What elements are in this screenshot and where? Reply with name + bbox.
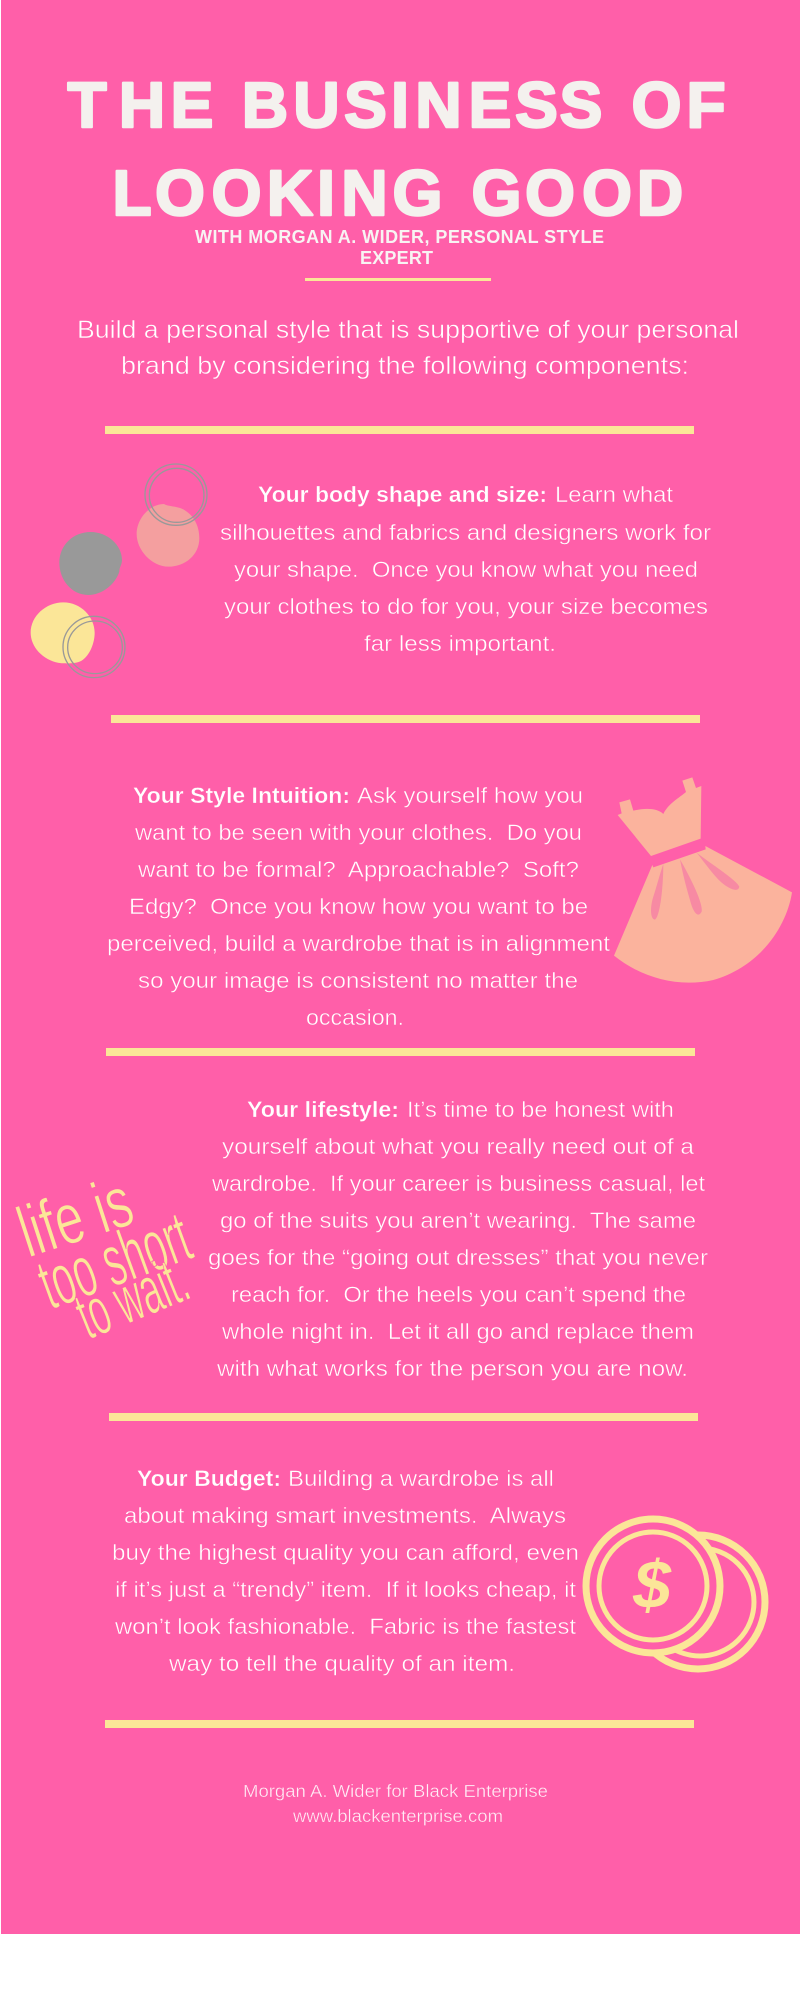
text: body shape and size: far less important.	[364, 631, 556, 656]
text: lifestyle: whole night in. Let it all go and replace them	[221, 1319, 694, 1344]
text: style intuition: so your image is consistent no matter the	[138, 968, 578, 993]
icon: coins: $	[632, 1547, 672, 1623]
divider 1	[105, 426, 694, 434]
text: budget: way to tell the quality of an item.	[168, 1651, 515, 1676]
text: body shape and size	[220, 482, 711, 656]
text: lifestyle: yourself about what you really need out of a	[222, 1134, 695, 1159]
title: THE	[67, 69, 213, 141]
text: lifestyle: go of the suits you aren’t wearing. The same	[220, 1208, 696, 1233]
text: budget: won’t look fashionable. Fabric is the fastest	[114, 1614, 576, 1639]
hand-lettered quote: too short	[28, 1197, 201, 1325]
footer credit	[243, 1781, 548, 1826]
text: lifestyle: goes for the “going out dresses” that you never	[208, 1245, 708, 1270]
text: style intuition: perceived, build a wardrobe that is in alignment	[107, 931, 610, 956]
hand-lettered quote: to wait.	[65, 1240, 199, 1354]
title	[67, 69, 726, 229]
title: GOOD	[472, 157, 683, 229]
icon: circles and rings	[31, 464, 207, 678]
text: lifestyle: It’s time to be honest with	[407, 1097, 674, 1122]
title: LOOKING	[112, 157, 442, 229]
intro text: brand by considering the following components:	[121, 352, 689, 380]
text: budget	[112, 1466, 579, 1676]
text: budget: about making smart investments. Always	[124, 1503, 566, 1528]
text: body shape and size: your clothes to do for you, your size becomes	[224, 594, 708, 619]
text: lifestyle	[208, 1097, 708, 1381]
footer credit: www.blackenterprise.com	[292, 1806, 503, 1826]
text: budget: Building a wardrobe is all	[288, 1466, 554, 1491]
text: budget: buy the highest quality you can afford, even	[112, 1540, 579, 1565]
icon: coins	[586, 1519, 765, 1669]
text: budget: if it’s just a “trendy” item. If it looks cheap, it	[115, 1577, 576, 1602]
text: style intuition: occasion.	[306, 1005, 404, 1030]
divider 4	[109, 1413, 698, 1421]
text: budget: Your Budget:	[137, 1466, 281, 1491]
text: body shape and size: Learn what	[555, 482, 673, 507]
text: body shape and size: Your body shape and size:	[258, 482, 547, 507]
text: lifestyle: with what works for the person you are now.	[216, 1356, 688, 1381]
footer credit: Morgan A. Wider for Black Enterprise	[243, 1781, 548, 1801]
text: style intuition	[107, 783, 610, 1030]
hand-lettered quote: life is	[8, 1162, 142, 1274]
text: lifestyle: Your lifestyle:	[247, 1097, 399, 1122]
text: body shape and size: silhouettes and fabrics and designers work for	[220, 520, 711, 545]
intro text: Build a personal style that is supportive of your personal	[77, 316, 739, 344]
text: style intuition: Edgy? Once you know how you want to be	[129, 894, 588, 919]
text: style intuition: want to be formal? Approachable? Soft?	[137, 857, 579, 882]
text: lifestyle: wardrobe. If your career is business casual, let	[211, 1171, 705, 1196]
title: OF	[632, 69, 726, 141]
subtitle: WITH MORGAN A. WIDER, PERSONAL STYLE	[195, 227, 604, 247]
divider 2	[111, 715, 700, 723]
subtitle	[195, 227, 604, 268]
text: style intuition: want to be seen with your clothes. Do you	[134, 820, 582, 845]
divider 3	[106, 1048, 695, 1056]
hand-lettered quote	[8, 1162, 201, 1354]
text: lifestyle: reach for. Or the heels you can’t spend the	[231, 1282, 686, 1307]
title underline	[305, 278, 491, 281]
text: style intuition: Ask yourself how you	[357, 783, 583, 808]
divider 5	[105, 1720, 694, 1728]
text: style intuition: Your Style Intuition:	[133, 783, 350, 808]
text: body shape and size: your shape. Once you know what you need	[234, 557, 698, 582]
subtitle: EXPERT	[360, 248, 433, 268]
icon: dress	[614, 777, 792, 983]
title: BUSINESS	[242, 69, 602, 141]
intro text	[77, 316, 739, 380]
